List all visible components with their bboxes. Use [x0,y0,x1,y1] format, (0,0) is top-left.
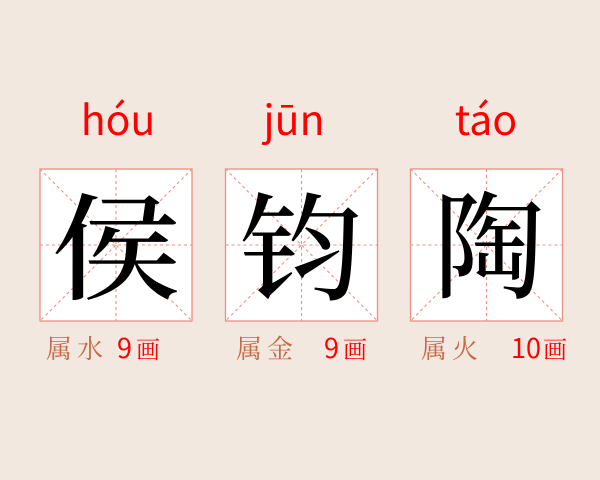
stroke count 9画 [117,327,160,366]
pinyin: táo: táo [455,87,517,147]
element label 属水: 属水 [46,329,103,366]
stroke count 9画: 画 [343,330,367,365]
stroke count 9画: 9 [324,327,339,366]
stroke count 9画: 画 [136,330,160,365]
stroke count 9画: 9 [117,327,132,366]
panel: character hóu [40,87,192,366]
character 侯: 侯 [51,158,181,324]
pinyin: hóu: hóu [81,87,155,147]
character 陶: 陶 [434,156,544,322]
panel: character táo [410,87,567,366]
pinyin: jūn: jūn [261,87,325,147]
panel: character jūn [226,87,378,366]
grid box 2 [226,169,378,321]
element label 属金: 属金 [236,329,293,366]
stroke count 9画 [324,327,367,366]
grid box 1 [40,169,192,321]
element label 属火: 属火 [421,329,478,366]
stroke count 10画 [511,327,567,366]
grid box 3 [410,169,562,321]
stroke count 10画: 画 [543,330,567,365]
stroke count 10画: 10 [511,327,541,366]
character 钧: 钧 [239,156,362,325]
